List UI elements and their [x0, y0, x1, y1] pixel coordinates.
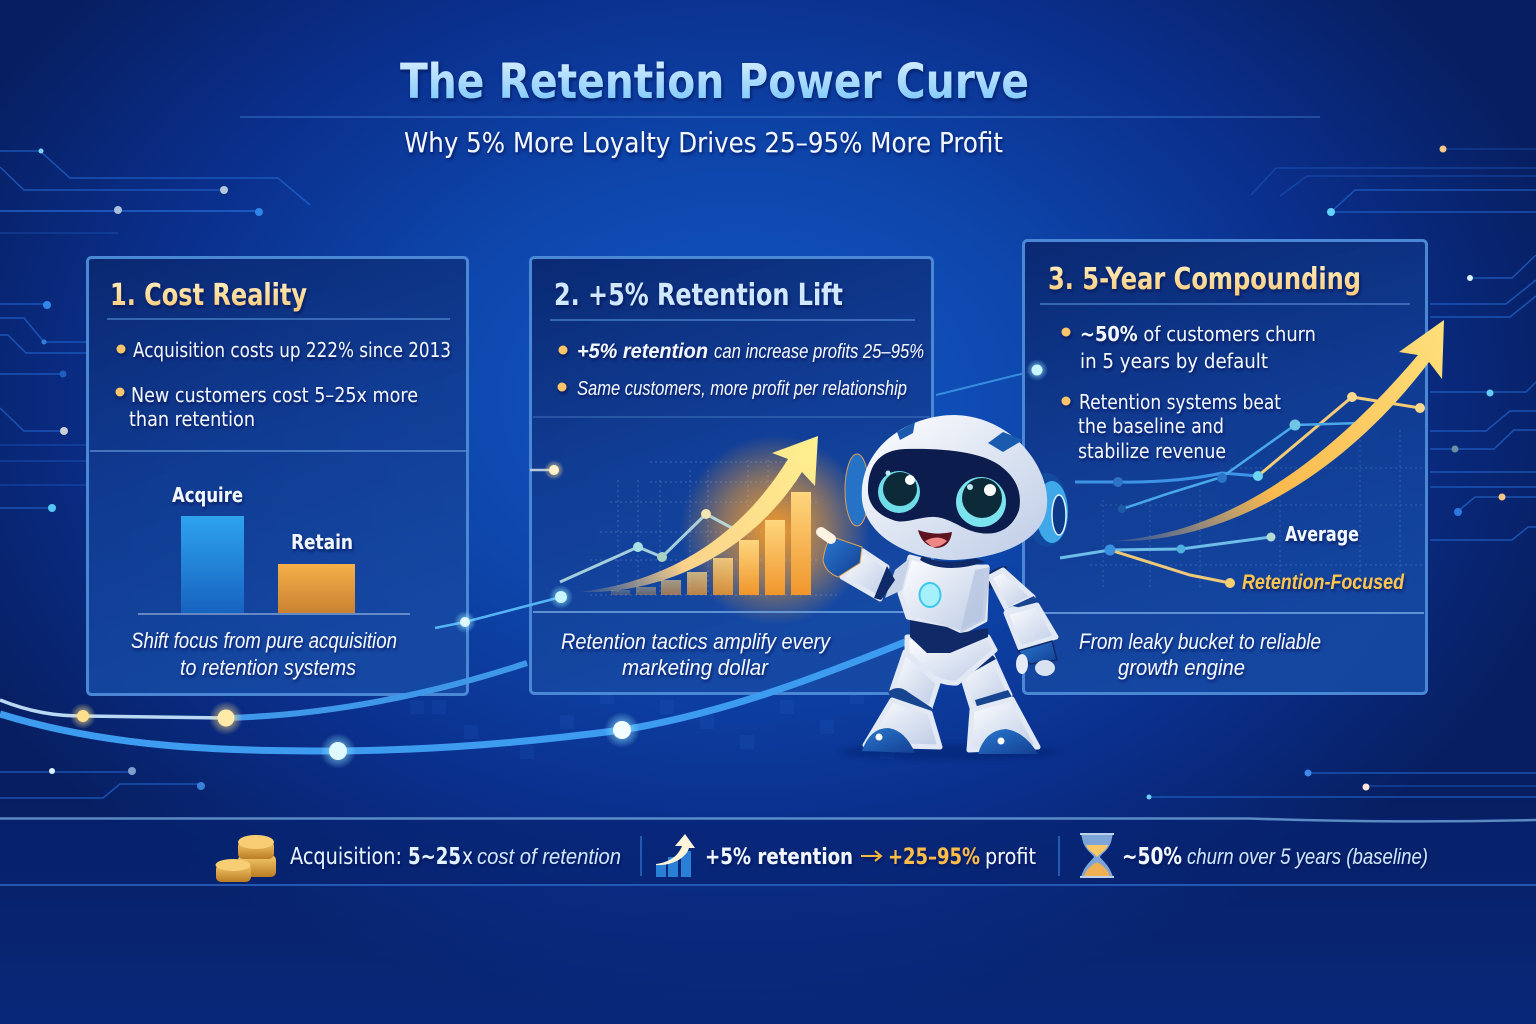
caption: Retention tactics amplify every [561, 629, 832, 654]
robot torso [900, 556, 995, 683]
caption: to retention systems [180, 655, 356, 680]
bullet list: than retention [129, 407, 255, 431]
robot right arm [983, 566, 1057, 676]
bullet list: ~50% of customers churn [1080, 322, 1316, 346]
robot head [862, 415, 1047, 560]
panel: compounding [1024, 240, 1444, 694]
caption: Shift focus from pure acquisition [131, 628, 397, 653]
caption: growth engine [1118, 655, 1245, 680]
robot left arm [821, 532, 910, 600]
bullet list: Acquisition costs up 222% since 2013 [133, 338, 451, 362]
panel: retention lift [530, 258, 932, 694]
caption [561, 629, 832, 680]
heading: 3. 5-Year Compounding [1048, 262, 1361, 297]
robot ear left [845, 454, 869, 526]
eye left [878, 470, 920, 513]
heading: 2. +5% Retention Lift [554, 278, 843, 313]
stat: churn [1122, 844, 1428, 870]
stat: retention: profit [985, 845, 1036, 870]
stat: retention: +5% retention [705, 845, 853, 870]
power curve lines [0, 470, 905, 751]
caption [131, 628, 397, 680]
label: average: Average [1285, 522, 1359, 546]
line chart with growth arrow [1060, 320, 1444, 594]
bullet list: stabilize revenue [1078, 439, 1226, 463]
circuit lines right [1149, 149, 1536, 797]
caption: marketing dollar [622, 655, 770, 680]
curve nodes [70, 359, 1048, 769]
mouth [918, 530, 952, 548]
circuit nodes [38, 146, 1506, 800]
bullet list [116, 338, 451, 431]
icon: coins [216, 835, 276, 882]
icon: hourglass [1080, 833, 1114, 877]
panel: cost reality [88, 258, 468, 694]
stat: acquisition [290, 844, 621, 870]
circuit lines left [0, 151, 1037, 798]
stat: churn: ~50% [1122, 844, 1182, 870]
stat: retention: +25–95% [888, 845, 980, 870]
label: retention-focused: Retention-Focused [1242, 571, 1405, 594]
subtitle: Why 5% More Loyalty Drives 25–95% More Profit [404, 126, 1003, 159]
icon: growth arrow [656, 834, 695, 877]
bullet list: in 5 years by default [1080, 349, 1268, 373]
caption: From leaky bucket to reliable [1079, 629, 1321, 654]
visor [868, 449, 1020, 534]
stat: acquisition: x [462, 844, 473, 870]
head plates [897, 422, 1023, 452]
growth chart [560, 435, 870, 625]
stat: retention [705, 845, 1036, 870]
stat: acquisition: cost of retention [477, 844, 621, 869]
stat: acquisition: 5~25 [408, 844, 461, 870]
title: The Retention Power Curve [400, 54, 1029, 110]
bullet list: the baseline and [1078, 414, 1224, 438]
bar chart: acquire vs retain: Acquire [172, 483, 243, 507]
bullet list [558, 340, 924, 400]
title rule [240, 116, 1320, 118]
eye right [956, 477, 1006, 527]
stat: churn: churn over 5 years (baseline) [1187, 844, 1428, 869]
bar chart: acquire vs retain: Retain [291, 530, 353, 554]
bar chart: acquire vs retain [138, 483, 410, 614]
bullet list: Same customers, more profit per relationship [577, 378, 907, 400]
bullet list [1062, 322, 1316, 463]
heading: 1. Cost Reality [110, 278, 307, 313]
stat: acquisition: Acquisition: [290, 844, 402, 870]
robot legs [862, 652, 1038, 754]
bullet list: New customers cost 5–25x more [131, 383, 418, 407]
caption [1079, 629, 1321, 680]
robot mascot [821, 415, 1068, 760]
bullet list: +5% retention [577, 340, 708, 363]
bullet list: Retention systems beat [1079, 390, 1281, 414]
robot ear right [1026, 473, 1068, 547]
bullet list: can increase profits 25–95% [714, 341, 924, 363]
footer band [0, 818, 1536, 886]
